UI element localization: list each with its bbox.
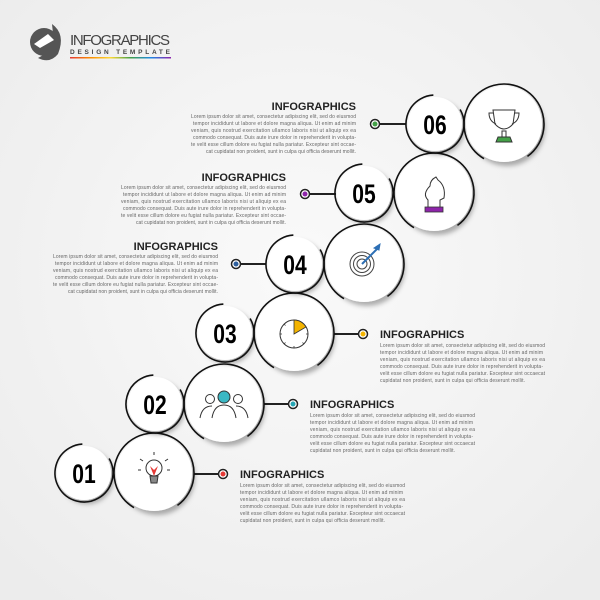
step 05: 05 xyxy=(352,180,376,210)
step 02 xyxy=(115,349,476,459)
step 02: commodo consequat. Duis aute irure dolor in reprehenderit in volupta- xyxy=(310,434,473,440)
logo xyxy=(30,24,171,60)
step 04: te velit esse cillum dolore eu fugiat nulla pariatur. Excepteur sint occae- xyxy=(53,282,218,288)
icon: clock xyxy=(280,320,308,348)
step 05: commodo consequat. Duis aute irure dolor in reprehenderit in volupta- xyxy=(123,206,286,212)
step 03: Lorem ipsum dolor sit amet, consectetur adipiscing elit, sed do eiusmod xyxy=(380,343,545,349)
step 02: veniam, quis nostrud exercitation ullamco laboris nisi ut aliquip ex ea xyxy=(310,427,475,433)
step 01: INFOGRAPHICS xyxy=(240,469,324,481)
step 04: cat cupidatat non proident, sunt in culpa qui officia deserunt mollit. xyxy=(68,289,218,295)
step 06: 06 xyxy=(423,111,447,141)
step 01: Lorem ipsum dolor sit amet, consectetur adipiscing elit, sed do eiusmod xyxy=(240,483,405,489)
step 02: cupidatat non proident, sunt in culpa qui officia deserunt mollit. xyxy=(310,448,455,454)
step 04: INFOGRAPHICS xyxy=(134,241,218,253)
icon: people xyxy=(200,391,248,418)
step 01: veniam, quis nostrud exercitation ullamco laboris nisi ut aliquip ex ea xyxy=(240,497,405,503)
step 03: velit esse cillum dolore eu fugiat nulla pariatur. Excepteur sint occaecat xyxy=(380,371,546,377)
step 02: Lorem ipsum dolor sit amet, consectetur adipiscing elit, sed do eiusmod xyxy=(310,413,475,419)
step 04: 04 xyxy=(283,251,307,281)
step 01: commodo consequat. Duis aute irure dolor in reprehenderit in volupta- xyxy=(240,504,403,510)
logo: INFOGRAPHICS xyxy=(70,32,170,49)
icon: target xyxy=(350,244,380,276)
step 06: cat cupidatat non proident, sunt in culpa qui officia deserunt mollit. xyxy=(206,149,356,155)
step 05: veniam, quis nostrud exercitation ullamco laboris nisi ut aliquip ex ea xyxy=(121,199,286,205)
step 02: INFOGRAPHICS xyxy=(310,399,394,411)
step 03: tempor incididunt ut labore et dolore magna aliqua. Ut enim ad minim xyxy=(380,350,543,356)
step 01 xyxy=(44,418,406,528)
step 01: 01 xyxy=(72,460,96,490)
step 01: tempor incididunt ut labore et dolore magna aliqua. Ut enim ad minim xyxy=(240,490,403,496)
step 02: tempor incididunt ut labore et dolore magna aliqua. Ut enim ad minim xyxy=(310,420,473,426)
step 06: veniam, quis nostrud exercitation ullamco laboris nisi ut aliquip ex ea xyxy=(191,128,356,134)
step 06 xyxy=(191,69,559,179)
icon: trophy xyxy=(489,110,519,142)
step 03 xyxy=(185,278,546,388)
step 03: INFOGRAPHICS xyxy=(380,329,464,341)
step 04: tempor incididunt ut labore et dolore magna aliqua. Ut enim ad minim xyxy=(55,261,218,267)
step 06: te velit esse cillum dolore eu fugiat nulla pariatur. Excepteur sint occae- xyxy=(191,142,356,148)
step 03: veniam, quis nostrud exercitation ullamco laboris nisi ut aliquip ex ea xyxy=(380,357,545,363)
icon: bulb xyxy=(138,452,170,483)
step 05: cat cupidatat non proident, sunt in culpa qui officia deserunt mollit. xyxy=(136,220,286,226)
step 03: 03 xyxy=(213,320,237,350)
step 06: INFOGRAPHICS xyxy=(272,101,356,113)
logo: DESIGN TEMPLATE xyxy=(70,49,171,56)
step 04: Lorem ipsum dolor sit amet, consectetur adipiscing elit, sed do eiusmod xyxy=(53,254,218,260)
step 04: veniam, quis nostrud exercitation ullamco laboris nisi ut aliquip ex ea xyxy=(53,268,218,274)
step 02: 02 xyxy=(143,391,167,421)
icon: knight xyxy=(425,177,444,212)
step 02: velit esse cillum dolore eu fugiat nulla pariatur. Excepteur sint occaecat xyxy=(310,441,476,447)
step 05: Lorem ipsum dolor sit amet, consectetur adipiscing elit, sed do eiusmod xyxy=(121,185,286,191)
step 04: commodo consequat. Duis aute irure dolor in reprehenderit in volupta- xyxy=(55,275,218,281)
step 05 xyxy=(121,138,489,248)
step 05: tempor incididunt ut labore et dolore magna aliqua. Ut enim ad minim xyxy=(123,192,286,198)
step 05: te velit esse cillum dolore eu fugiat nulla pariatur. Excepteur sint occae- xyxy=(121,213,286,219)
step 05: INFOGRAPHICS xyxy=(202,172,286,184)
step 06: Lorem ipsum dolor sit amet, consectetur adipiscing elit, sed do eiusmod xyxy=(191,114,356,120)
step 06: commodo consequat. Duis aute irure dolor in reprehenderit in volupta- xyxy=(193,135,356,141)
step 03: cupidatat non proident, sunt in culpa qui officia deserunt mollit. xyxy=(380,378,525,384)
step 01: velit esse cillum dolore eu fugiat nulla pariatur. Excepteur sint occaecat xyxy=(240,511,406,517)
step 01: cupidatat non proident, sunt in culpa qui officia deserunt mollit. xyxy=(240,518,385,524)
step 06: tempor incididunt ut labore et dolore magna aliqua. Ut enim ad minim xyxy=(193,121,356,127)
step 04 xyxy=(53,209,419,319)
step 03: commodo consequat. Duis aute irure dolor in reprehenderit in volupta- xyxy=(380,364,543,370)
